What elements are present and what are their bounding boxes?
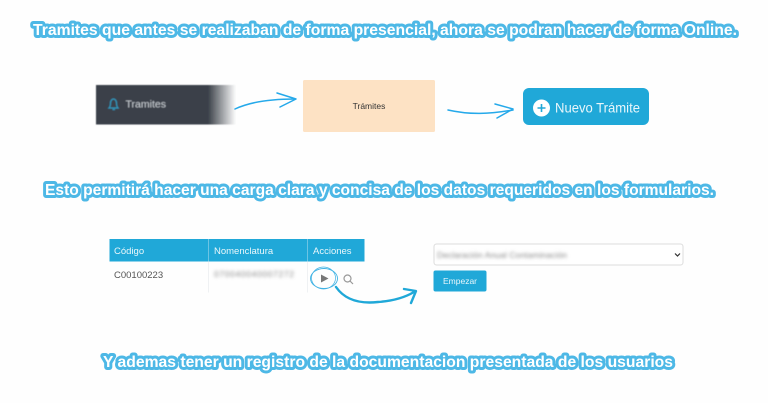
button label: Nuevo Trámite (555, 100, 640, 116)
arrow: play to form (336, 287, 416, 303)
blurred nomenclature cell: 070040040007272 (214, 269, 294, 279)
icon: plus circle (533, 100, 550, 116)
heading: online procedures: Tramites que antes se realizaban de forma presencial, ahora se podran hacer de forma Online. (33, 22, 737, 39)
panel: peach Trámites card (303, 80, 435, 132)
table header: Código (114, 246, 144, 257)
card label: Trámites (353, 101, 385, 111)
table header: Nomenclatura (214, 246, 274, 257)
table: procedures (110, 239, 364, 292)
select field (434, 244, 683, 265)
table header: Acciones (313, 246, 352, 257)
button: Empezar: Empezar (443, 276, 477, 286)
form: select and start button (434, 244, 683, 292)
menu label: Tramites (126, 98, 166, 110)
button: Nuevo Trámite (523, 88, 649, 125)
arrow: menu to panel (235, 93, 296, 109)
icon: bell (109, 99, 118, 110)
select field: Declaración Anual Contaminación (437, 250, 567, 260)
panel: dark menu item (96, 85, 236, 124)
button: Empezar (434, 270, 486, 292)
table header (110, 239, 364, 262)
icon: circled play (310, 267, 338, 289)
icon: search (344, 275, 353, 284)
heading: document record: Y ademas tener un registro de la documentacion presentada de los usuarios (103, 354, 673, 371)
heading: clear data entry: Esto permitirá hacer una carga clara y concisa de los datos requeridos en los formularios. (45, 182, 714, 199)
code cell: C00100223 (114, 270, 163, 281)
arrow: panel to button (448, 104, 513, 118)
